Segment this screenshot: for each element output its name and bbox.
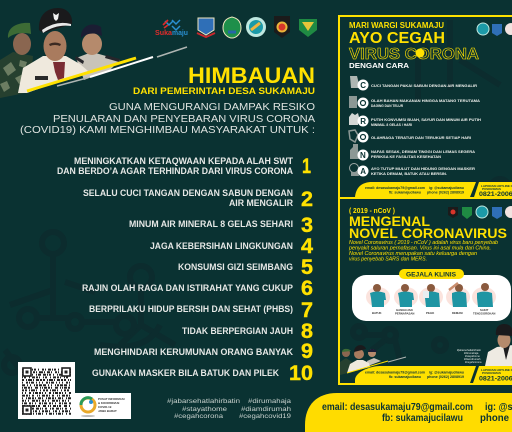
logo: round health emblem [246, 17, 266, 37]
bottom contact band: fb: sukamajucilawu [382, 412, 463, 424]
list of ten appeals [57, 155, 313, 385]
logo caption: COVID-19 [98, 405, 112, 409]
item 10: GUNAKAN MASKER BILA BATUK DAN PILEK [92, 368, 279, 378]
intro text [20, 101, 315, 136]
contact footer: fb: sukamajucilawu [389, 374, 422, 379]
item 8 [182, 320, 313, 343]
item 9: 9 [301, 340, 313, 363]
label: 2019-nCoV: ( 2019 - nCoV ) [349, 208, 395, 215]
item 6: 6 [301, 277, 313, 300]
contact footer: fb: sukamajucilawu [389, 190, 422, 194]
contact footer: email: desasukamaju79@gmail.com [365, 370, 425, 374]
small grey slash [388, 357, 406, 362]
figure: gangguan pernapasan [394, 284, 418, 316]
step N: PERIKSA KE FASILITAS KESEHATAN [371, 154, 441, 159]
small caption [457, 348, 482, 364]
item 5 [178, 256, 313, 279]
item 10: 10 [289, 362, 313, 385]
description: penyakit saluran pernafasan. Virus ini asal mula dari China. [348, 246, 491, 252]
figure: sakit tenggorokan: SAKIT [480, 308, 489, 312]
hashtags: #jabarsehatlahirbatin [167, 398, 241, 405]
contact footer: phone (0262) 2808919 [427, 190, 465, 194]
figure: batuk: BATUK [372, 311, 382, 315]
pill: gejala klinis [399, 269, 464, 279]
figure: gangguan pernapasan: GANGGUAN [396, 308, 413, 312]
small slashes [347, 361, 388, 373]
description: Novel Coronavirus ( 2019 - nCoV ) adalah virus baru penyebab [349, 240, 498, 246]
logo: Sukamaju [155, 20, 188, 37]
item 3 [129, 214, 313, 237]
small caption: #diamdirumah [464, 357, 481, 361]
item 1: DAN BERDO’A AGAR TERHINDAR DARI VIRUS CORONA [57, 166, 293, 176]
item 3: MINUM AIR MINERAL 8 GELAS SEHARI [129, 219, 293, 229]
decorative slashes [27, 47, 187, 91]
contact footer: ig: @sukamajucilawu [429, 370, 465, 374]
step A: AYO TUTUP MULUT DAN HIDUNG DENGAN MASKER [371, 166, 475, 171]
item 4: 4 [301, 235, 313, 258]
item 2 [83, 188, 313, 211]
panel logos [477, 23, 512, 36]
hashtags: #cegahcovid19 [239, 413, 292, 420]
hashtags: #diamdirumah [241, 406, 292, 413]
step R: PUTIH KONVUMSI BUAH, SAYUR DAN MINUM AIR PUTIH [371, 117, 481, 122]
small caption: #stayathome [465, 354, 480, 358]
step A: A [360, 167, 366, 176]
logo caption: PUSAT INFORMASI [98, 397, 125, 401]
step O exercise: OLAHRAGA TERATUR DAN TERUKUR SETIAP HARI [371, 135, 471, 140]
village head in white uniform [18, 8, 88, 93]
hashtags: #cegahcorona [174, 413, 224, 420]
step A: KETIKA DEMAM, BATUK ATAU BERSIN. [371, 171, 447, 176]
item 8: TIDAK BERPERGIAN JAUH [182, 326, 293, 336]
step N: NAFAS SESAK, DEMAM TINGGI DAN LEMAS SEGERA [371, 149, 475, 154]
soldier [0, 23, 33, 98]
contact footer: PUSKESMAS [482, 371, 501, 375]
figure: demam: DEMAM [452, 311, 463, 315]
figure: sakit tenggorokan [472, 283, 496, 316]
photo: three officials [0, 8, 120, 98]
item 1: 1 [302, 155, 311, 178]
step A [350, 164, 475, 176]
heading: mengenal: MENGENAL [349, 214, 430, 229]
contact footer [355, 182, 512, 198]
heading: virus corona outlined: VIRUS CORONA [349, 46, 479, 63]
item 1: MENINGKATKAN KETAQWAAN KEPADA ALAH SWT [74, 156, 293, 166]
governor photo [485, 324, 512, 366]
intro text: (COVID19) KAMI MENGHIMBAU MASYARAKAT UNTUK : [20, 124, 315, 136]
pill: gejala klinis: GEJALA KLINIS [406, 272, 457, 278]
description: Novel Coronavirus merupakan satu keluarga dengan [349, 251, 477, 257]
symptoms card [352, 269, 511, 321]
small caption: #cegahcorona [465, 360, 482, 364]
heading: HIMBAUAN: HIMBAUAN [188, 63, 315, 88]
panel: ayo cegah virus corona [339, 16, 512, 198]
hashtags: #dirumahaja [248, 398, 292, 405]
item 1 [57, 155, 311, 178]
logo: Kabupaten Garut shield [197, 18, 215, 37]
bottom contact band: email: desasukamaju79@gmail.com [322, 401, 473, 413]
step R: MINIMAL 8 GELAS / HARI [371, 122, 412, 127]
intro text: GUNA MENGURANGI DAMPAK RESIKO [109, 101, 315, 113]
item 6: RAJIN OLAH RAGA DAN ISTIRAHAT YANG CUKUP [82, 283, 293, 293]
small officials photo [340, 345, 381, 375]
item 4: JAGA KEBERSIHAN LINGKUNGAN [150, 241, 293, 251]
logo: Sukamaju: Suka [155, 30, 172, 37]
heading: novel coronavirus: NOVEL CORONAVIRUS [349, 226, 507, 241]
contact footer: phone (0262) 2808919 [427, 374, 465, 379]
item 3: 3 [301, 214, 313, 237]
step O: DAGING DAN TELUR [371, 103, 403, 108]
heading: dengan cara: DENGAN CARA [349, 61, 410, 70]
figure: batuk [366, 284, 390, 315]
panel: mengenal novel coronavirus [339, 198, 512, 384]
step O exercise [349, 130, 471, 142]
step N [350, 144, 475, 160]
item 2: SELALU CUCI TANGAN DENGAN SABUN DENGAN [83, 188, 293, 198]
item 2: AIR MENGALIR [229, 198, 293, 208]
intro text: PENULARAN DAN PENYEBARAN VIRUS CORONA [53, 113, 315, 125]
logo: police shield [274, 16, 290, 38]
heading: ayo cegah: AYO CEGAH [349, 30, 445, 47]
item 5: KONSUMSI GIZI SEIMBANG [178, 262, 293, 272]
figure: gangguan pernapasan: PERNAPASAN [395, 312, 414, 316]
step C: C [360, 81, 366, 90]
contact footer: PUSKESMAS [482, 187, 501, 191]
step C [350, 76, 477, 90]
item 4 [150, 235, 313, 258]
item 2: 2 [301, 188, 313, 211]
item 9: MENGHINDARI KERUMUNAN ORANG BANYAK [94, 347, 293, 357]
item 10 [92, 362, 313, 385]
contact footer: email: desasukamaju79@gmail.com [365, 185, 425, 190]
item 7: BERPRILAKU HIDUP BERSIH DAN SEHAT (PHBS) [89, 304, 293, 314]
panel logos [448, 206, 512, 219]
step R: R [360, 117, 366, 126]
description: virus penyebab SARS dan MERS. [349, 256, 427, 262]
logo caption: JAWA BARAT [98, 409, 117, 413]
logo: Pikobar ring [81, 398, 95, 417]
hashtags [167, 398, 292, 420]
small caption: #jabarsehatlahirbatin [457, 348, 482, 352]
step C: CUCI TANGAN PAKAI SABUN DENGAN AIR MENGALIR [371, 83, 477, 88]
step R [349, 113, 481, 127]
contact footer [355, 366, 512, 383]
description [348, 240, 498, 262]
step N: N [360, 151, 366, 160]
QR code card [18, 362, 131, 419]
logo caption [98, 397, 125, 413]
hashtags: #stayathome [182, 406, 228, 413]
step O [349, 96, 480, 108]
item 5: 5 [301, 256, 313, 279]
small caption: #dirumahaja [464, 351, 479, 355]
heading: mari warga: MARI WARGI SUKAMAJU [349, 21, 444, 30]
item 7 [89, 299, 313, 322]
item 6 [82, 277, 313, 300]
contact footer: ig: @sukamajucilawu [429, 185, 465, 190]
subheading: DARI PEMERINTAH DESA SUKAMAJU [133, 86, 315, 97]
logo: Sukamaju: maju [172, 30, 188, 37]
figure: pilek: PILEK [426, 311, 434, 315]
step O: OLAH BAHAN MAKANAN HINGGA MATANG TERUTAMA [371, 98, 480, 103]
police officer [75, 24, 120, 80]
figure: pilek [419, 284, 443, 315]
logo: army shield [299, 19, 317, 37]
item 8: 8 [301, 320, 313, 343]
logo caption: & KOORDINASI [98, 401, 120, 405]
figure: demam [446, 283, 470, 315]
item 7: 7 [301, 299, 313, 322]
logo: Jawa Barat [223, 17, 241, 38]
item 9 [94, 340, 313, 363]
figure: sakit tenggorokan: TENGGOROKAN [473, 312, 495, 316]
bottom contact band [305, 393, 512, 432]
sponsor logos [155, 16, 317, 38]
